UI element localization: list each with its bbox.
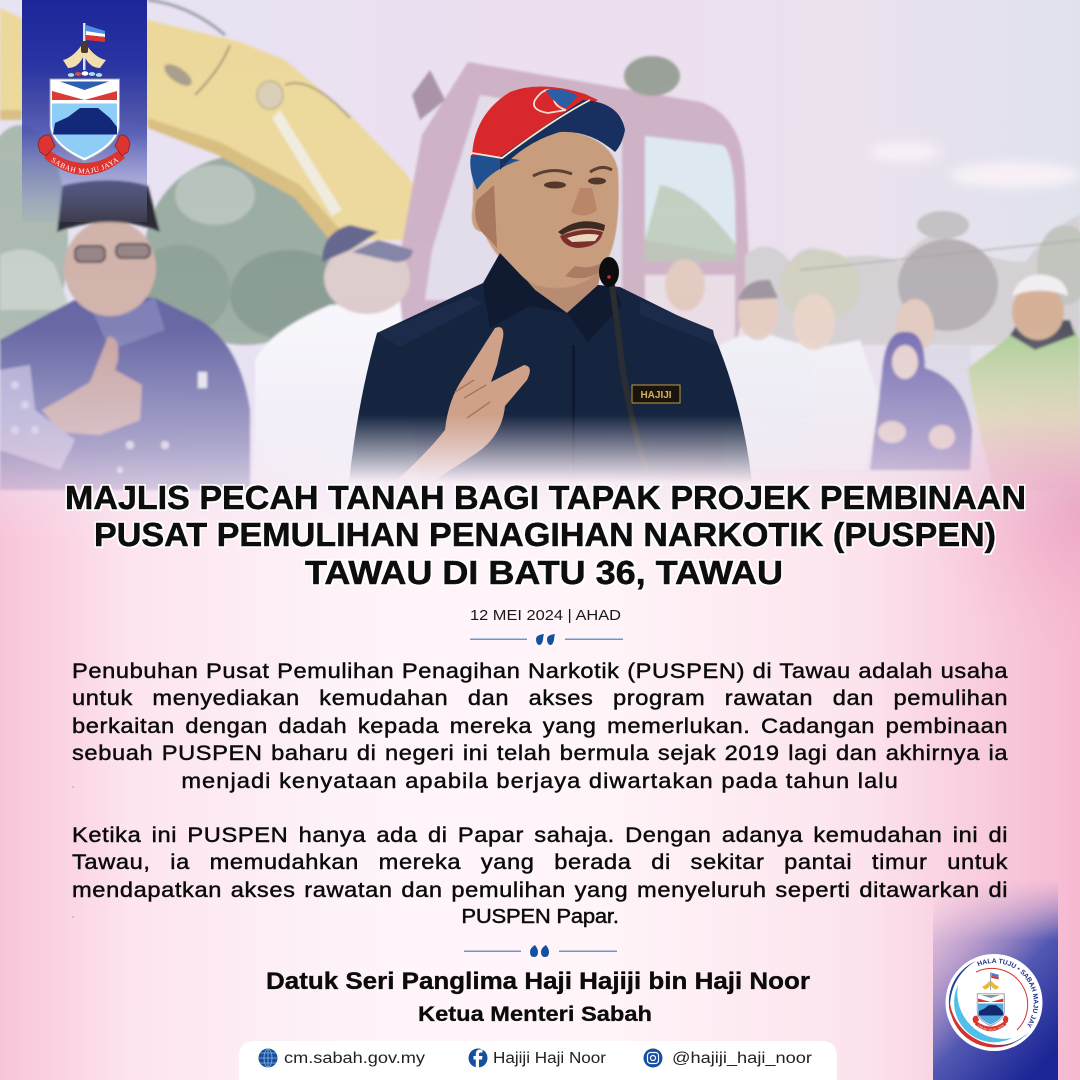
paragraph one: Penubuhan Pusat Pemulihan Penagihan Narkotik (PUSPEN) di Tawau adalah usaha bbox=[72, 658, 1008, 682]
title bbox=[65, 479, 1026, 591]
paragraph two: Ketika ini PUSPEN hanya ada di Papar sahaja. Dengan adanya kemudahan ini di bbox=[72, 822, 1008, 846]
palm trees right bbox=[745, 211, 1080, 345]
man in white shirt and cap bbox=[255, 224, 414, 448]
paragraph two: PUSPEN Papar. bbox=[461, 906, 619, 928]
badge red arc bbox=[976, 968, 1028, 1030]
facebook text: Hajiji Haji Noor bbox=[493, 1050, 606, 1067]
badge ring text: HALA TUJU • SABAH MAJU JAYA bbox=[977, 958, 1038, 1028]
crest hands bbox=[63, 46, 106, 68]
footer contact bar bbox=[239, 1041, 837, 1080]
divider with opening quote bbox=[470, 634, 623, 645]
date: 12 MEI 2024 | AHAD bbox=[470, 607, 621, 624]
crest flag bbox=[83, 23, 105, 70]
paragraph two: mendapatkan akses rawatan dan pemulihan yang menyeluruh seperti ditawarkan di bbox=[72, 878, 1008, 902]
blue strip bottom right bbox=[933, 880, 1058, 1080]
title: MAJLIS PECAH TANAH BAGI TAPAK PROJEK PEMBINAAN bbox=[65, 479, 1026, 516]
badge crescents bbox=[949, 961, 1030, 1048]
microphone bbox=[599, 257, 644, 456]
title: TAWAU DI BATU 36, TAWAU bbox=[305, 554, 783, 591]
name badge bbox=[632, 385, 680, 403]
crest ribbon with motto: SABAH MAJU JAYA bbox=[51, 158, 119, 174]
paragraph one: untuk menyediakan kemudahan dan akses program rawatan dan pemulihan bbox=[72, 686, 1008, 710]
name badge: HAJIJI bbox=[640, 390, 672, 401]
man in songkok left bbox=[0, 180, 250, 490]
blue strip behind crest bbox=[22, 0, 147, 222]
instagram text: @hajiji_haji_noor bbox=[672, 1050, 812, 1067]
shirt bbox=[349, 253, 752, 482]
speaker position: Ketua Menteri Sabah bbox=[418, 1003, 652, 1026]
crest shield bbox=[50, 79, 120, 161]
divider with closing quote bbox=[464, 945, 617, 957]
icon: facebook bbox=[468, 1048, 488, 1068]
icon: instagram bbox=[644, 1048, 662, 1068]
crowd right bbox=[665, 259, 1080, 490]
crest ribbon with motto bbox=[38, 134, 130, 175]
badge crest: SABAH MAJU JAYA bbox=[978, 1024, 1004, 1031]
collar bbox=[483, 253, 622, 342]
excavator arm bbox=[0, 0, 432, 240]
crest gems bbox=[68, 71, 102, 77]
paragraph two: Tawau, ia memudahkan mereka yang berada di sekitar pantai timur untuk bbox=[72, 850, 1008, 874]
background photo: excavator site and crowd bbox=[0, 0, 1080, 490]
main figure: speaker with cap and microphone bbox=[349, 86, 752, 482]
cap bbox=[470, 86, 625, 190]
Sabah crest top left bbox=[38, 23, 130, 175]
icon: website globe bbox=[258, 1048, 278, 1068]
tiny marks by paragraphs bbox=[72, 786, 74, 918]
shirt details bbox=[377, 296, 483, 347]
title: PUSAT PEMULIHAN PENAGIHAN NARKOTIK (PUSPEN) bbox=[94, 516, 996, 553]
badge crest bbox=[972, 972, 1008, 1032]
paragraph one: sebuah PUSPEN baharu di negeri ini telah bermula sejak 2019 lagi dan akhirnya ia bbox=[72, 741, 1008, 765]
website text: cm.sabah.gov.my bbox=[284, 1050, 425, 1067]
paragraph two bbox=[72, 822, 1008, 928]
paragraph one: menjadi kenyataan apabila berjaya diwartakan pada tahun lalu bbox=[181, 768, 899, 792]
paragraph one: berkaitan dengan dadah kepada mereka yang memerlukan. Cadangan pembinaan bbox=[72, 714, 1008, 738]
paragraph one bbox=[72, 658, 1008, 793]
sky clouds bbox=[870, 142, 1080, 188]
neck and face bbox=[524, 272, 600, 313]
speaker name: Datuk Seri Panglima Haji Hajiji bin Haji Noor bbox=[266, 968, 810, 995]
raised hand bbox=[395, 327, 530, 482]
palm trees left bbox=[0, 125, 350, 355]
excavator cab bbox=[400, 56, 750, 345]
